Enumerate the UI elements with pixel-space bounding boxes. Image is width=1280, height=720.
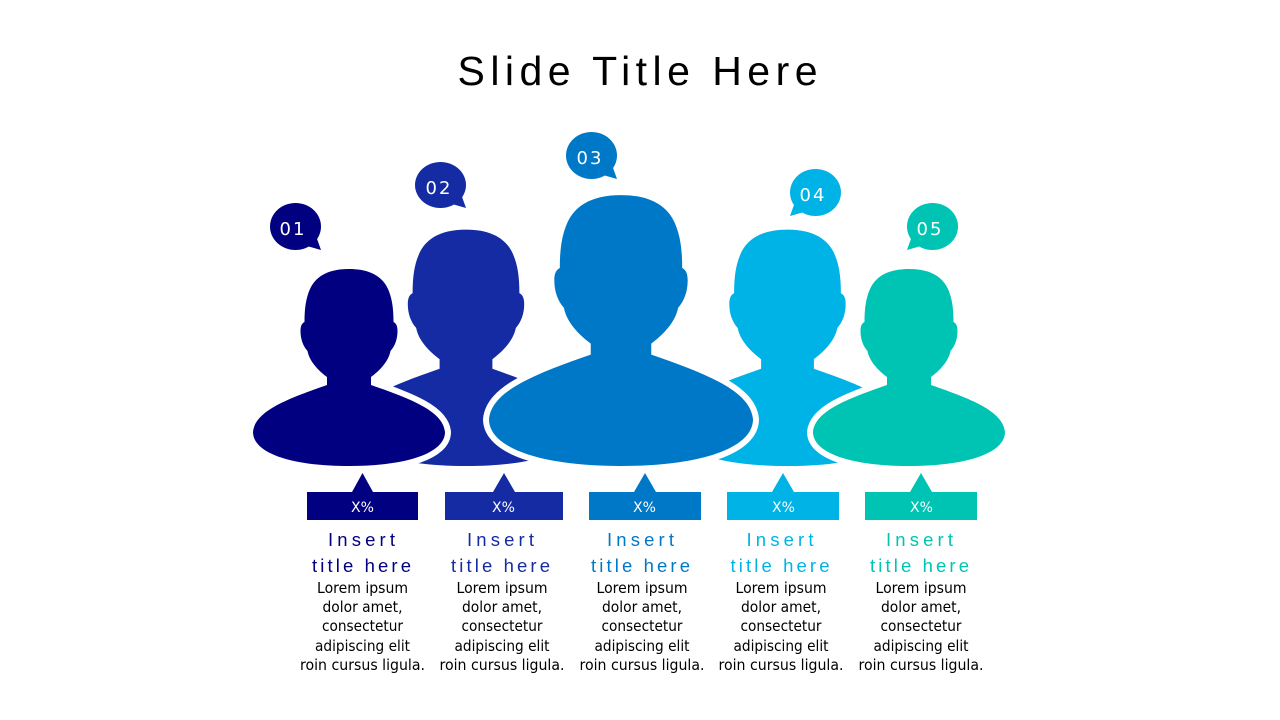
- column 5 text: adipiscing elit: [874, 637, 969, 655]
- column 4 heading: title here: [730, 555, 830, 576]
- column 1: [300, 473, 425, 674]
- speech bubble 02: [415, 162, 466, 208]
- person 3 silhouette: [489, 195, 753, 466]
- column 2 text: [440, 579, 564, 674]
- column 3 text: consectetur: [602, 617, 683, 635]
- person 4 silhouette: [672, 230, 903, 466]
- value tag 2: [445, 473, 563, 520]
- speech bubble 04: [790, 169, 841, 216]
- speech bubble 05: [907, 203, 958, 250]
- value tag 4: X%: [772, 500, 795, 516]
- column 3 text: dolor amet,: [602, 598, 682, 616]
- column 1 text: [300, 579, 425, 674]
- column 2 heading: Insert: [467, 529, 534, 550]
- column 5 text: dolor amet,: [881, 598, 961, 616]
- column 3 heading: Insert: [607, 529, 674, 550]
- column 4 heading: Insert: [746, 529, 814, 550]
- column 1 text: roin cursus ligula.: [300, 656, 425, 674]
- column 1 text: consectetur: [322, 617, 404, 635]
- column 4 text: Lorem ipsum: [736, 579, 826, 597]
- speech bubble 04: 04: [800, 185, 826, 206]
- column 1 text: Lorem ipsum: [317, 579, 408, 597]
- column 2 text: roin cursus ligula.: [440, 656, 564, 674]
- value tag 5: [865, 473, 977, 520]
- person 1 silhouette: [253, 269, 445, 466]
- speech bubble 05: 05: [917, 219, 943, 240]
- column 1 heading: [312, 529, 411, 576]
- person 2 silhouette: [351, 230, 581, 466]
- column 4: [718, 473, 844, 674]
- column 2 heading: [451, 529, 550, 576]
- column 3 heading: title here: [591, 555, 690, 576]
- column 4 heading: [730, 529, 830, 576]
- column 5 text: Lorem ipsum: [876, 579, 966, 597]
- person 5 silhouette: [813, 269, 1005, 466]
- column 1 text: dolor amet,: [322, 598, 402, 616]
- column 1 heading: Insert: [328, 529, 395, 550]
- column 4 text: dolor amet,: [741, 598, 821, 616]
- column 5 heading: title here: [870, 555, 969, 576]
- column 2 text: Lorem ipsum: [456, 579, 548, 597]
- value tag 4: [727, 473, 839, 520]
- column 5 heading: [870, 529, 969, 576]
- speech bubble 01: [270, 203, 321, 250]
- column 1 heading: title here: [312, 555, 411, 576]
- column 5 text: consectetur: [880, 617, 962, 635]
- column 3: [580, 473, 704, 674]
- column 4 text: adipiscing elit: [734, 637, 829, 655]
- column 4 text: [718, 579, 844, 674]
- column 3 text: Lorem ipsum: [596, 579, 688, 597]
- column 3 text: adipiscing elit: [594, 637, 690, 655]
- column 2 text: consectetur: [462, 617, 543, 635]
- column 2 heading: title here: [451, 555, 550, 576]
- column 3 text: roin cursus ligula.: [580, 656, 704, 674]
- title: Slide Title Here: [458, 48, 818, 94]
- column 2 text: dolor amet,: [462, 598, 542, 616]
- value tag 1: [307, 473, 418, 520]
- speech bubble 02: 02: [426, 178, 452, 199]
- column 5 text: [858, 579, 984, 674]
- column 5: [858, 473, 984, 674]
- value tag 2: X%: [492, 500, 515, 516]
- speech bubble 03: 03: [577, 148, 603, 169]
- column 5 text: roin cursus ligula.: [858, 656, 984, 674]
- column 5 heading: Insert: [886, 529, 953, 550]
- value tag 5: X%: [910, 500, 933, 516]
- speech bubble 03: [566, 132, 617, 179]
- column 3 text: [580, 579, 704, 674]
- column 4 text: roin cursus ligula.: [718, 656, 844, 674]
- column 4 text: consectetur: [740, 617, 822, 635]
- column 2: [440, 473, 564, 674]
- column 2 text: adipiscing elit: [454, 637, 550, 655]
- value tag 3: [589, 473, 701, 520]
- speech bubble 01: 01: [280, 219, 306, 240]
- column 1 text: adipiscing elit: [315, 637, 410, 655]
- value tag 3: X%: [633, 500, 656, 516]
- value tag 1: X%: [351, 500, 374, 516]
- column 3 heading: [591, 529, 690, 576]
